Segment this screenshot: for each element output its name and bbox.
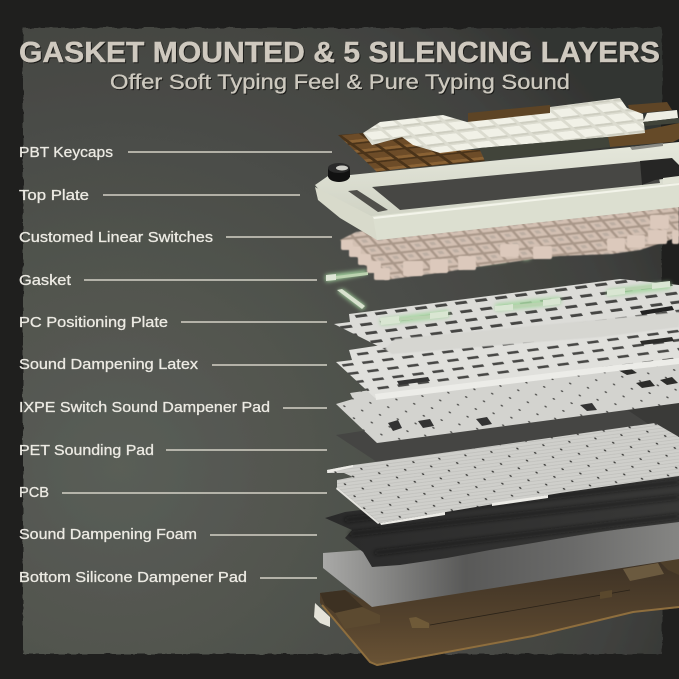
- label: Top Plate: Top Plate: [19, 187, 89, 204]
- layer: sound dampening latex: [336, 300, 679, 400]
- dark space bar: [480, 137, 610, 161]
- label: PBT Keycaps: PBT Keycaps: [19, 144, 113, 161]
- white keys: [363, 98, 645, 153]
- brown back strip: [468, 105, 552, 122]
- brown right keys: [608, 123, 679, 147]
- label: Gasket: Gasket: [19, 272, 72, 289]
- layer labels: [19, 144, 332, 586]
- layer: top plate frame: [315, 142, 679, 240]
- layer: PET sounding pad: [336, 392, 679, 462]
- label: PET Sounding Pad: PET Sounding Pad: [19, 442, 154, 459]
- window in frame: [372, 160, 660, 210]
- layer: PC positioning plate: [334, 279, 679, 354]
- icon: volume knob: [328, 163, 350, 182]
- label: PC Positioning Plate: PC Positioning Plate: [19, 314, 168, 331]
- layer: linear switches: [340, 190, 679, 280]
- label: Sound Dampening Latex: Sound Dampening Latex: [19, 356, 199, 373]
- layer: IXPE dampener pad: [336, 345, 679, 443]
- layer: keycaps: [338, 98, 679, 172]
- exploded keyboard illustration: [314, 98, 679, 666]
- label: Sound Dampening Foam: Sound Dampening Foam: [19, 526, 197, 543]
- layer: sound dampening foam: [325, 470, 679, 567]
- layer: PCB: [327, 423, 679, 525]
- layer: gasket strips: [325, 245, 671, 325]
- layer: bottom silicone pad: [323, 520, 679, 607]
- brown left keys: [338, 133, 485, 172]
- title: GASKET MOUNTED & 5 SILENCING LAYERS: [19, 37, 660, 69]
- label: Bottom Silicone Dampener Pad: Bottom Silicone Dampener Pad: [19, 569, 247, 586]
- icon: white side switch tab: [314, 603, 330, 627]
- layer: bottom case: [314, 555, 679, 666]
- label: IXPE Switch Sound Dampener Pad: IXPE Switch Sound Dampener Pad: [19, 399, 270, 416]
- label: Customed Linear Switches: Customed Linear Switches: [19, 229, 213, 246]
- subtitle: Offer Soft Typing Feel & Pure Typing Sound: [110, 71, 570, 94]
- gray key: [630, 143, 663, 150]
- label: PCB: PCB: [19, 484, 49, 501]
